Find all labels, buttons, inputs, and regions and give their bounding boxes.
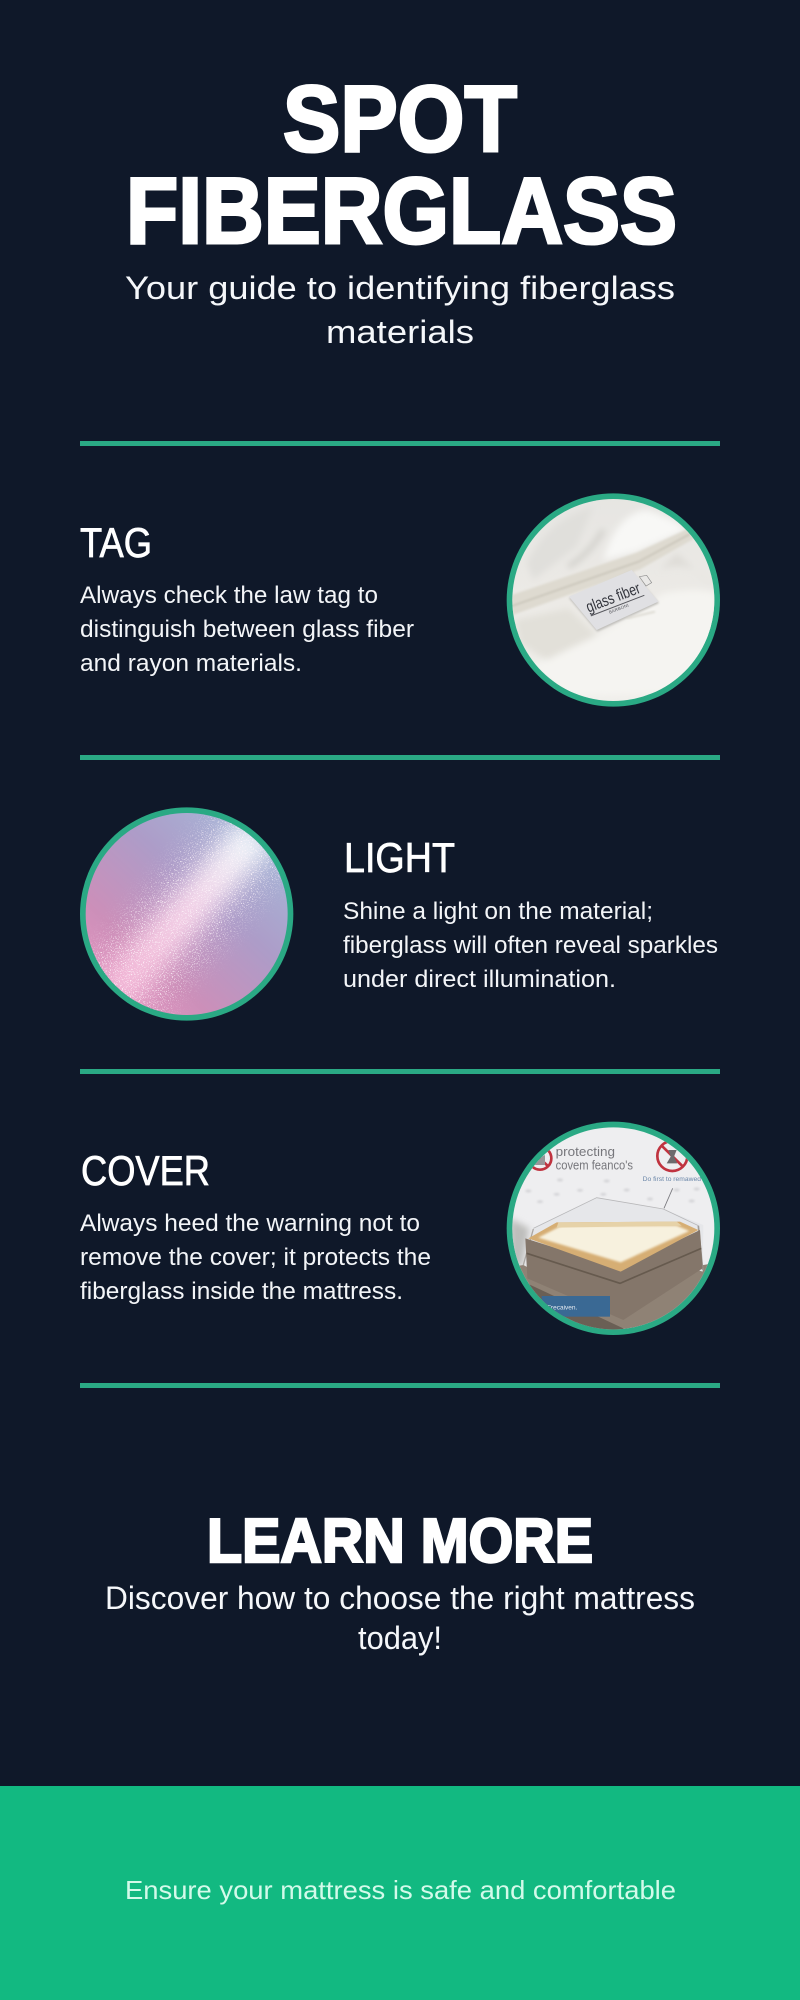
- image: mattress with protective cover: protecting: [556, 1145, 615, 1159]
- divider 1: [80, 441, 720, 446]
- title: FIBERGLASS: [126, 158, 677, 263]
- text: cover description: fiberglass inside the mattress.: [80, 1278, 403, 1305]
- zipper band: [512, 529, 694, 615]
- heading: tag: TAG: [80, 519, 152, 566]
- cover sheet: [699, 1269, 703, 1272]
- image: mattress with protective cover: Do first to remawed: [643, 1176, 701, 1183]
- divider 4: [80, 1383, 720, 1388]
- panel: cover: [80, 1118, 723, 1338]
- footer band: [0, 1786, 800, 2000]
- image: fabric law tag: [503, 490, 723, 710]
- divider 3: [80, 1069, 720, 1074]
- subtitle: [125, 270, 675, 350]
- text: cover description: Always heed the warning not to: [80, 1210, 420, 1237]
- subtitle: materials: [326, 314, 474, 350]
- footer text: Ensure your mattress is safe and comfortable: [125, 1875, 676, 1905]
- image: fabric law tag: glass fiber: [584, 580, 643, 616]
- text: light description: [343, 898, 718, 993]
- foam layer: [528, 1222, 698, 1272]
- heading: learn more: LEARN MORE: [207, 1507, 593, 1576]
- call to action: [105, 1507, 695, 1656]
- text: light description: under direct illumination.: [343, 966, 616, 993]
- text: tag description: [80, 582, 414, 677]
- base and floor: [520, 1264, 708, 1330]
- image: mattress with protective cover: covem feanco's: [556, 1159, 633, 1173]
- text: cover description: remove the cover; it protects the: [80, 1244, 431, 1271]
- text: tag description: Always check the law tag to: [80, 582, 378, 609]
- title: SPOT: [283, 66, 517, 171]
- image: mattress with protective cover: Γrecaiven.: [547, 1305, 578, 1312]
- image: sparkling fiberglass under light: [80, 807, 300, 1027]
- header: [125, 66, 677, 350]
- heading: light: LIGHT: [344, 834, 455, 881]
- text: tag description: and rayon materials.: [80, 650, 302, 677]
- text: light description: fiberglass will often reveal sparkles: [343, 932, 718, 959]
- title: [126, 66, 677, 263]
- warning signs and captions: [529, 1141, 687, 1171]
- subtitle: Your guide to identifying fiberglass: [125, 270, 675, 306]
- panel: tag: [80, 490, 723, 710]
- text: light description: Shine a light on the material;: [343, 898, 653, 925]
- fabric tag: [569, 571, 659, 632]
- text: call to action: Discover how to choose the right mattress: [105, 1580, 695, 1616]
- image: mattress with protective cover: [503, 1118, 723, 1338]
- image: fabric law tag: BARBONI: [608, 603, 629, 615]
- text: tag description: distinguish between glass fiber: [80, 616, 414, 643]
- text: call to action: [105, 1580, 695, 1656]
- heading: cover: COVER: [81, 1147, 210, 1194]
- quilt dots: [525, 1179, 700, 1203]
- panel: light: [80, 807, 718, 1027]
- text: cover description: [80, 1210, 431, 1305]
- text: call to action: today!: [358, 1620, 442, 1656]
- divider 2: [80, 755, 720, 760]
- blue label: [542, 1296, 610, 1317]
- mattress side faces: [525, 1230, 703, 1320]
